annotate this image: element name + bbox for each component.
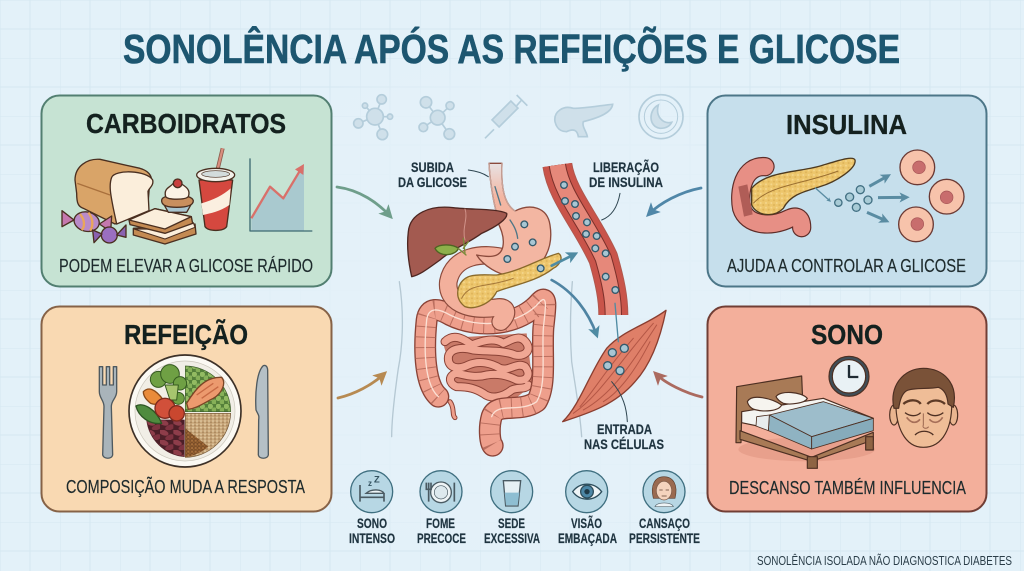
broccoli xyxy=(150,365,187,404)
icon: sono intenso: z xyxy=(368,479,372,488)
small intestine xyxy=(442,333,533,400)
label: sede excessiva: SEDE xyxy=(498,516,525,531)
label: sono intenso: SONO xyxy=(357,516,387,531)
caption: insulina: AJUDA A CONTROLAR A GLICOSE xyxy=(727,256,966,276)
blood vessel xyxy=(557,165,613,315)
label: cansaço persistente: PERSISTENTE xyxy=(629,531,700,546)
pancreas xyxy=(458,253,561,308)
label: liberação de insulina xyxy=(589,160,663,190)
label: entrada nas células: ENTRADA xyxy=(597,422,652,437)
leader lines xyxy=(468,170,627,422)
label: cansaço persistente xyxy=(629,516,700,546)
icon: sede excessiva xyxy=(491,471,533,513)
illustration: digestive system, vessel and muscle xyxy=(392,163,666,446)
label: subida da glicose: DA GLICOSE xyxy=(398,175,467,190)
label: visão embaçada xyxy=(558,516,617,546)
label: subida da glicose xyxy=(398,160,467,190)
label: sono intenso: INTENSO xyxy=(349,531,395,546)
label: sede excessiva xyxy=(484,516,540,546)
panel: insulina xyxy=(708,96,986,286)
label: fome precoce: PRECOCE xyxy=(417,531,466,546)
heading: carboidratos: CARBOIDRATOS xyxy=(86,108,286,139)
label: cansaço persistente: CANSAÇO xyxy=(639,516,690,531)
label: liberação de insulina: DE INSULINA xyxy=(589,175,663,190)
arrows: panels to center xyxy=(337,187,702,398)
icon: plate with fork and knife xyxy=(99,355,268,467)
label: sono intenso xyxy=(349,516,395,546)
heading: sono: SONO xyxy=(811,319,883,350)
icon: cansaço persistente xyxy=(643,471,685,513)
esophagus and duodenum xyxy=(448,255,507,322)
muscle xyxy=(563,310,666,422)
icon: pancreas releasing insulin to cells xyxy=(738,150,964,242)
faint icons row xyxy=(354,95,683,140)
label: fome precoce: FOME xyxy=(426,516,455,531)
stomach xyxy=(477,163,551,276)
icon: sono intenso: Z xyxy=(374,475,380,485)
icon: fome precoce xyxy=(420,471,462,513)
icon: sono intenso xyxy=(351,471,393,513)
panel: refeição xyxy=(42,306,332,512)
label: liberação de insulina: LIBERAÇÃO xyxy=(593,160,659,175)
caption: refeição: COMPOSIÇÃO MUDA A RESPOSTA xyxy=(66,476,305,497)
heading: refeição: REFEIÇÃO xyxy=(124,319,248,350)
icon: carb foods and glucose chart xyxy=(62,148,312,244)
label: fome precoce xyxy=(417,516,466,546)
heading: insulina: INSULINA xyxy=(786,109,907,140)
liver xyxy=(408,207,507,277)
label: entrada nas células: NAS CÉLULAS xyxy=(584,437,664,452)
label: entrada nas células xyxy=(584,422,664,452)
icon: bed, clock and tired face xyxy=(736,356,958,468)
panel: carboidratos xyxy=(42,96,332,286)
caption: carboidratos: PODEM ELEVAR A GLICOSE RÁPIDO xyxy=(59,256,313,276)
arrows: flows between organs xyxy=(552,254,597,335)
symptoms row xyxy=(349,471,700,546)
label: sede excessiva: EXCESSIVA xyxy=(484,531,540,546)
label: visão embaçada: VISÃO xyxy=(571,516,602,531)
caption: sono: DESCANSO TAMBÉM INFLUENCIA xyxy=(729,478,966,498)
label: visão embaçada: EMBAÇADA xyxy=(558,531,617,546)
label: subida da glicose: SUBIDA xyxy=(411,160,454,175)
panel: sono xyxy=(708,306,986,512)
icon: visão embaçada xyxy=(566,471,608,513)
colon xyxy=(425,300,545,446)
